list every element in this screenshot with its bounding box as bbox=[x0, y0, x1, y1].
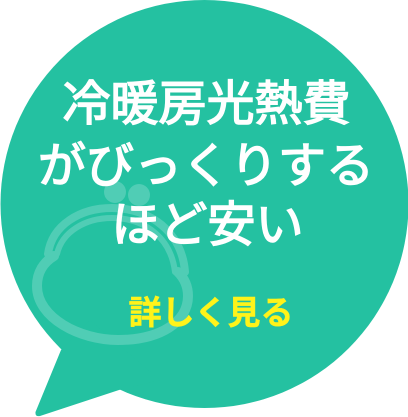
title: がびっくりする bbox=[38, 140, 374, 193]
link text: 詳しく見る bbox=[128, 294, 294, 331]
title: 冷暖房光熱費 bbox=[62, 78, 351, 131]
icon: coin purse bbox=[37, 181, 188, 340]
title: ほど安い bbox=[111, 199, 304, 252]
title bbox=[38, 78, 374, 252]
